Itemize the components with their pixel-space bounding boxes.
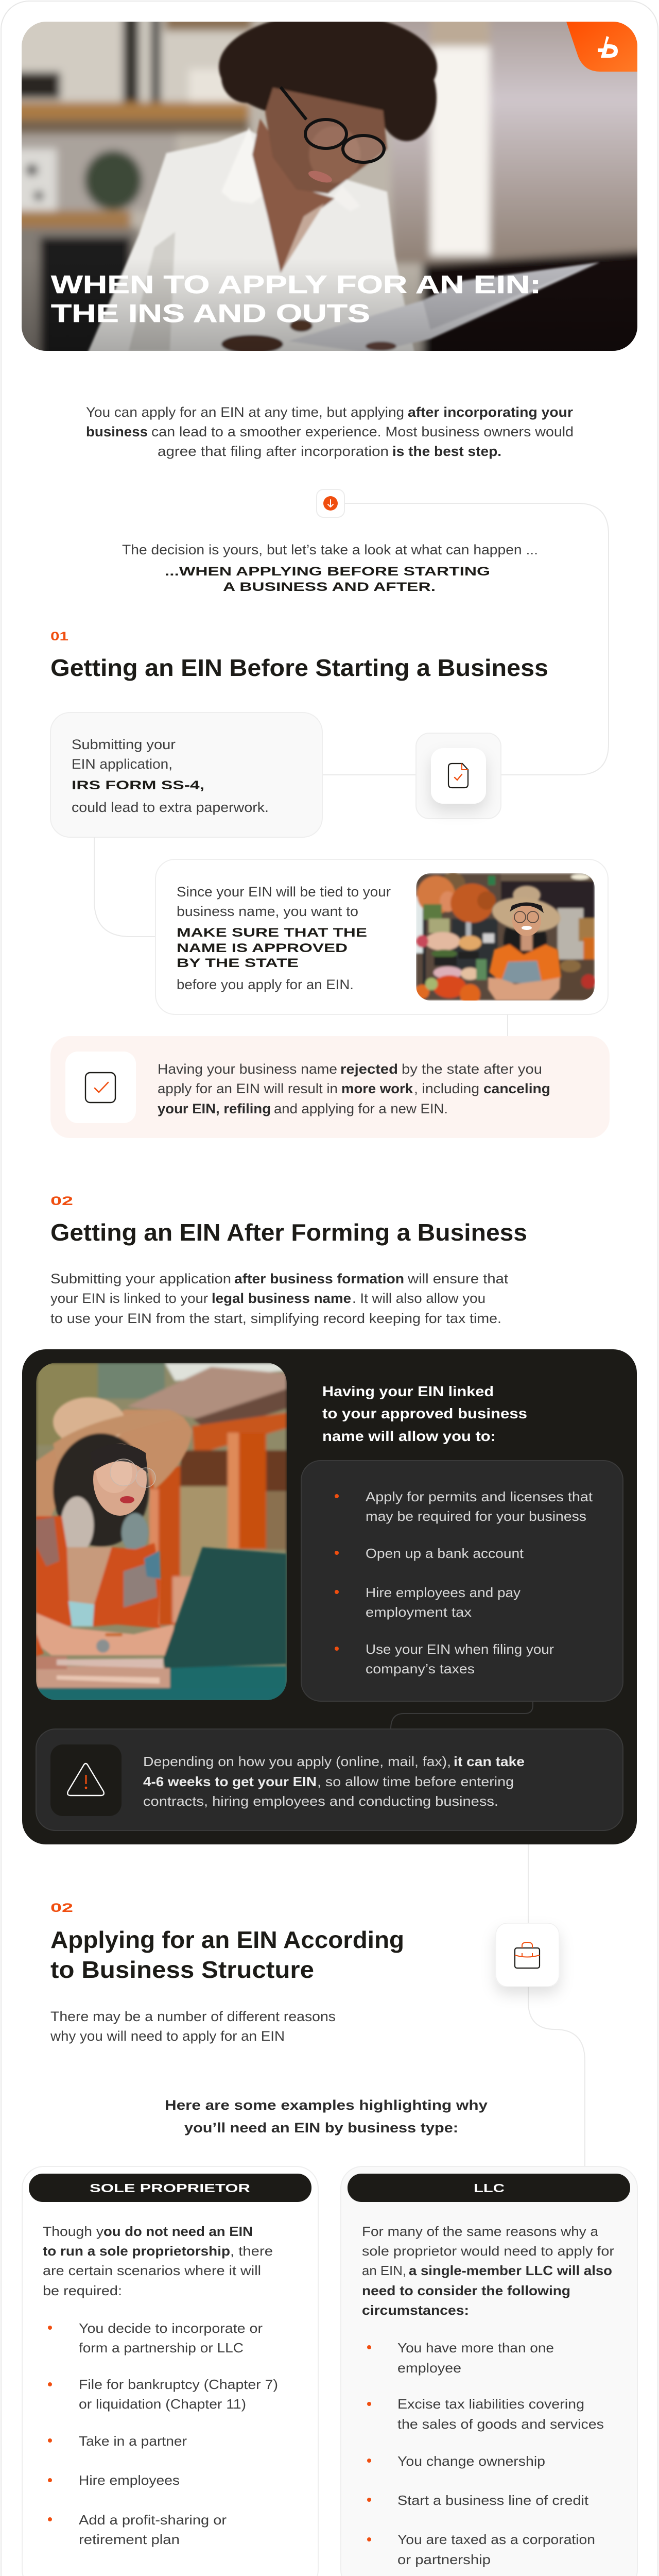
- callout: name rejected: more work: [341, 1081, 413, 1096]
- title: WHEN TO APPLY FOR AN EIN:: [51, 271, 541, 299]
- benefits list: Hire employees and pay: [366, 1585, 521, 1600]
- callout: name rejected: , including: [414, 1081, 479, 1096]
- benefits list: employment tax: [366, 1604, 472, 1620]
- benefits list: [301, 1461, 623, 1701]
- intro paragraph: is the best step.: [392, 444, 501, 459]
- section 02 paragraph: legal business name: [212, 1291, 351, 1306]
- card: business name approval: business name, you want to: [177, 904, 358, 919]
- card: business name approval: NAME IS APPROVED: [177, 941, 348, 955]
- section 02 heading: [50, 1194, 527, 1246]
- warning callout: [36, 1729, 623, 1831]
- section 02 paragraph: . It will also allow you: [352, 1291, 485, 1306]
- intro paragraph: can lead to a smoother experience. Most business owners would: [151, 424, 574, 439]
- orange corner badge: [566, 22, 637, 72]
- decision lead-in: ...WHEN APPLYING BEFORE STARTING: [165, 565, 490, 579]
- benefits list: company’s taxes: [366, 1661, 475, 1676]
- card: sole proprietor: form a partnership or LLC: [79, 2340, 244, 2355]
- card: LLC: a single-member LLC will also: [409, 2263, 612, 2278]
- benefits heading: name will allow you to:: [322, 1428, 496, 1444]
- warning callout: contracts, hiring employees and conducting business.: [143, 1793, 498, 1809]
- card: IRS form SS-4: EIN application,: [72, 756, 172, 772]
- section 02 paragraph: to use your EIN from the start, simplifying record keeping for tax time.: [50, 1311, 501, 1326]
- benefits list: Open up a bank account: [366, 1546, 524, 1561]
- intro paragraph: business: [86, 424, 148, 439]
- section 02 paragraph: [50, 1271, 509, 1326]
- callout: name rejected: [50, 1036, 610, 1138]
- card: business name approval: before you apply for an EIN.: [177, 977, 354, 992]
- examples heading: you’ll need an EIN by business type:: [184, 2120, 458, 2136]
- hero photo: woman reading a document: [11, 11, 648, 362]
- card: sole proprietor: [22, 2166, 318, 2576]
- card: sole proprietor: to run a sole proprietorship: [43, 2243, 230, 2259]
- card: LLC: need to consider the following: [362, 2283, 570, 2298]
- benefits heading: [322, 1383, 527, 1444]
- card: LLC: You change ownership: [397, 2453, 545, 2469]
- card: sole proprietor: , there: [230, 2243, 273, 2259]
- connector: card 1 to card 2: [94, 837, 155, 937]
- card: sole proprietor: retirement plan: [79, 2532, 180, 2547]
- section 02 heading: 02: [50, 1194, 73, 1208]
- card: sole proprietor: or liquidation (Chapter 11): [79, 2396, 246, 2412]
- card: sole proprietor: File for bankruptcy (Chapter 7): [79, 2377, 278, 2392]
- dark panel: benefits: [22, 1349, 637, 1844]
- warning callout: , so allow time before entering: [317, 1774, 514, 1789]
- section 02 paragraph: your EIN is linked to your: [50, 1291, 208, 1306]
- card: business name approval: Since your EIN will be tied to your: [177, 884, 391, 900]
- section 03 heading: [50, 1901, 404, 1983]
- card: LLC: or partnership: [397, 2552, 491, 2567]
- glasses and face details: [281, 87, 384, 185]
- callout: name rejected: your EIN, refiling: [158, 1101, 271, 1116]
- callout: name rejected: Having your business name: [158, 1061, 337, 1077]
- warning callout: 4-6 weeks to get your EIN: [143, 1774, 317, 1789]
- section 03 heading: Applying for an EIN According: [50, 1926, 404, 1953]
- card: business name approval: [155, 859, 608, 1014]
- decision lead-in: [122, 542, 538, 594]
- woman: [88, 13, 600, 353]
- callout: name rejected: rejected: [340, 1061, 398, 1077]
- section 03 heading: 02: [50, 1901, 73, 1915]
- benefits list: may be required for your business: [366, 1509, 586, 1524]
- section 01 heading: [50, 630, 548, 681]
- photo: woman with laptop: [36, 1363, 287, 1701]
- section 03 heading: to Business Structure: [50, 1956, 314, 1983]
- card: LLC: sole proprietor would need to apply for: [362, 2243, 614, 2259]
- card: LLC: Start a business line of credit: [397, 2493, 589, 2508]
- callout: name rejected: and applying for a new EIN.: [274, 1101, 448, 1116]
- icon: check box: [65, 1052, 136, 1123]
- card: LLC: LLC: [474, 2181, 505, 2195]
- card: business name approval: MAKE SURE THAT THE: [177, 926, 367, 940]
- decision lead-in: A BUSINESS AND AFTER.: [223, 580, 436, 594]
- card: business name approval: BY THE STATE: [177, 956, 299, 970]
- intro paragraph: after incorporating your: [408, 404, 573, 420]
- hero panel: [11, 11, 648, 362]
- section 02 heading: Getting an EIN After Forming a Business: [50, 1219, 527, 1246]
- icon: document with check: [416, 733, 501, 819]
- connector: intro to first card: [344, 503, 609, 775]
- callout: name rejected: by the state after you: [402, 1061, 542, 1077]
- warning callout: Depending on how you apply (online, mail, fax),: [143, 1754, 451, 1769]
- card: sole proprietor: Add a profit-sharing or: [79, 2512, 227, 2528]
- card: sole proprietor: Take in a partner: [79, 2433, 187, 2449]
- section 01 heading: Getting an EIN Before Starting a Business: [50, 654, 548, 681]
- intro paragraph: [86, 404, 574, 459]
- intro paragraph: agree that filing after incorporation: [158, 444, 389, 459]
- card: IRS form SS-4: could lead to extra paperwork.: [72, 800, 269, 815]
- title: THE INS AND OUTS: [51, 300, 370, 328]
- card: LLC: You have more than one: [397, 2340, 554, 2355]
- card: sole proprietor: are certain scenarios where it will: [43, 2263, 261, 2278]
- section 02 paragraph: after business formation: [234, 1271, 404, 1286]
- section 03 paragraph: why you will need to apply for an EIN: [50, 2028, 285, 2044]
- warning callout: it can take: [454, 1754, 525, 1769]
- section 03 paragraph: [50, 2009, 336, 2044]
- section 02 paragraph: will ensure that: [407, 1271, 509, 1286]
- icon: warning triangle: [50, 1744, 122, 1816]
- icon: down arrow: [317, 489, 344, 517]
- card: LLC: Excise tax liabilities covering: [397, 2396, 584, 2412]
- card: sole proprietor: You decide to incorporate or: [79, 2320, 263, 2336]
- photo: florist in hat: [415, 872, 596, 1005]
- card: LLC: [341, 2166, 637, 2576]
- section 02 paragraph: Submitting your application: [50, 1271, 231, 1286]
- intro paragraph: You can apply for an EIN at any time, but applying: [86, 404, 404, 420]
- card: LLC: You are taxed as a corporation: [397, 2532, 595, 2547]
- benefits heading: Having your EIN linked: [322, 1383, 494, 1399]
- title: [51, 271, 541, 328]
- icon: briefcase: [496, 1923, 559, 1987]
- benefits list: Use your EIN when filing your: [366, 1641, 554, 1657]
- section 03 paragraph: There may be a number of different reasons: [50, 2009, 336, 2024]
- benefits heading: to your approved business: [322, 1405, 527, 1421]
- card: LLC: an EIN,: [362, 2263, 406, 2278]
- callout: name rejected: apply for an EIN will result in: [158, 1081, 338, 1096]
- connector: card to icon: [322, 774, 416, 775]
- section 01 heading: 01: [50, 630, 68, 643]
- card: LLC: employee: [397, 2360, 461, 2376]
- card: IRS form SS-4: [50, 713, 322, 837]
- card: LLC: the sales of goods and services: [397, 2416, 604, 2432]
- examples heading: [165, 2097, 488, 2136]
- card: sole proprietor: ou do not need an EIN: [103, 2224, 253, 2239]
- connector: card 2 to callout: [507, 1014, 508, 1036]
- examples heading: Here are some examples highlighting why: [165, 2097, 488, 2113]
- hero background: [11, 11, 648, 362]
- card: LLC: circumstances:: [362, 2302, 469, 2318]
- decision lead-in: The decision is yours, but let’s take a look at what can happen ...: [122, 542, 538, 557]
- card: sole proprietor: Though y: [43, 2224, 103, 2239]
- benefits list: Apply for permits and licenses that: [366, 1489, 593, 1504]
- card: sole proprietor: SOLE PROPRIETOR: [90, 2181, 251, 2195]
- card: sole proprietor: be required:: [43, 2283, 122, 2298]
- card: IRS form SS-4: Submitting your: [72, 737, 176, 752]
- card: sole proprietor: Hire employees: [79, 2472, 180, 2488]
- card: IRS form SS-4: IRS FORM SS-4,: [72, 778, 204, 792]
- callout: name rejected: canceling: [483, 1081, 550, 1096]
- card: LLC: For many of the same reasons why a: [362, 2224, 599, 2239]
- connector: dark panel to briefcase and cards: [528, 1844, 585, 2166]
